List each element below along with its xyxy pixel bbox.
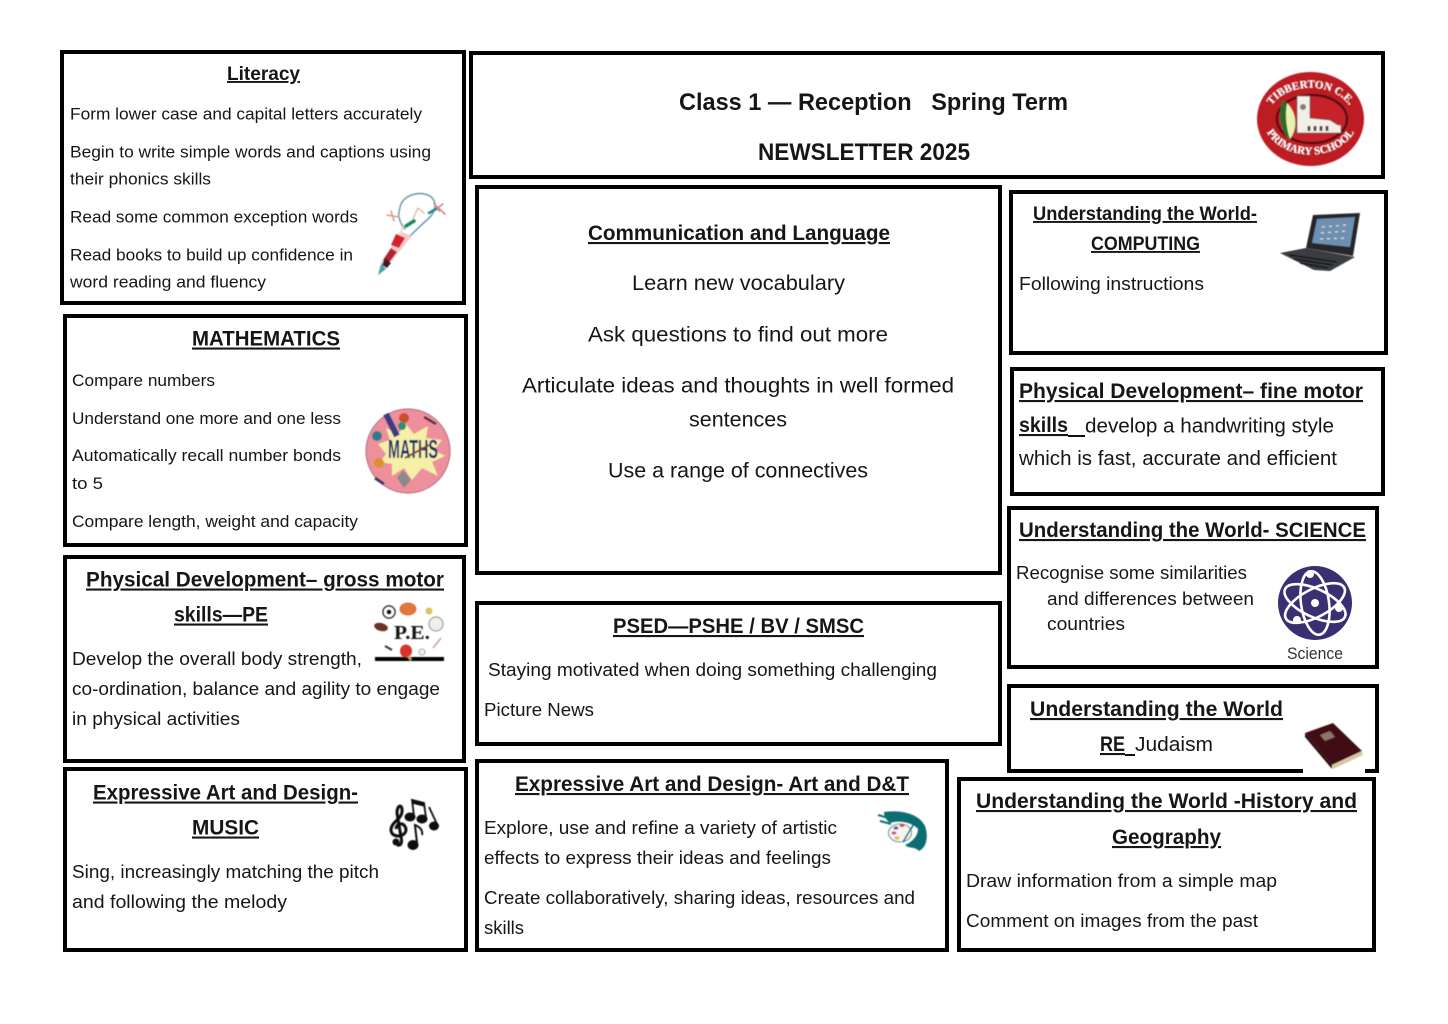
text: music objectives: [72, 862, 379, 912]
heading: music: [93, 782, 358, 840]
heading: computing: COMPUTING: [1091, 234, 1200, 255]
heading: gross motor: Physical Development– gross motor: [86, 568, 444, 592]
text: mathematics objectives: Automatically recall number bonds: [72, 446, 341, 465]
text: RE Judaism: [1100, 733, 1213, 756]
text: science objective: countries: [1047, 614, 1125, 634]
title: NEWSLETTER 2025: [758, 139, 970, 166]
panel: expressive art music: [65, 769, 466, 950]
panel: understanding the world science: [1009, 508, 1377, 667]
text: music objectives: and following the melody: [72, 892, 287, 912]
heading: computing: Understanding the World-: [1033, 204, 1257, 225]
text: communication objectives: Articulate ideas and thoughts in well formed: [522, 374, 954, 398]
text: literacy objectives: [69, 104, 431, 292]
title: [679, 89, 1068, 166]
text: art objectives: effects to express their ideas and feelings: [484, 848, 831, 868]
heading: computing: [1033, 204, 1257, 255]
text: music objectives: Sing, increasingly matching the pitch: [72, 862, 379, 882]
text: mathematics objectives: Understand one more and one less: [72, 409, 341, 428]
panel: understanding the world computing: [1011, 192, 1386, 353]
heading: PSED: PSED—PSHE / BV / SMSC: [613, 615, 864, 638]
text: computing objective: Following instructions: [1019, 274, 1204, 294]
panel: literacy: [62, 52, 464, 303]
icon: music notes: [391, 800, 439, 850]
panel: physical development fine motor: [1012, 369, 1383, 494]
text: gross motor objectives: [72, 649, 440, 729]
icon: maths badge: MATHS: [388, 434, 438, 464]
heading: fine motor: [1019, 380, 1363, 437]
text: mathematics objectives: [72, 371, 358, 531]
text: art objectives: [484, 818, 915, 938]
text: history objectives: Comment on images from the past: [966, 911, 1258, 931]
panel: mathematics: [65, 316, 466, 545]
text: art objectives: skills: [484, 918, 524, 938]
icon: school crest: TIBBERTON C.E.: [1266, 79, 1353, 106]
icon: school crest: PRIMARY SCHOOL: [1266, 128, 1355, 156]
heading: music: MUSIC: [192, 816, 259, 840]
text: fine motor objective: [1018, 416, 1337, 470]
text: fine motor objective: which is fast, accurate and efficient: [1018, 448, 1337, 470]
text: gross motor objectives: in physical activities: [72, 709, 240, 729]
icon: paint palette: [878, 811, 927, 851]
panel: physical development gross motor: [65, 557, 464, 761]
icon: science atom: [1278, 566, 1352, 663]
panel: understanding the world RE: [1009, 686, 1377, 774]
heading: history and geography: [976, 790, 1357, 849]
title: Class 1 — Reception Spring Term: [679, 89, 1068, 116]
text: science objective: Recognise some similarities: [1016, 563, 1247, 583]
text: PSED objectives: Staying motivated when doing something challenging: [488, 660, 937, 680]
text: communication objectives: Ask questions to find out more: [588, 324, 888, 346]
text: communication objectives: Use a range of connectives: [608, 460, 868, 482]
heading: gross motor: skills—PE: [174, 604, 268, 626]
text: communication objectives: sentences: [689, 408, 787, 432]
icon: light bulb pencil: [378, 194, 445, 275]
text: mathematics objectives: Compare numbers: [72, 371, 215, 390]
panel: understanding the world history and geography: [959, 779, 1374, 950]
heading: mathematics: MATHEMATICS: [192, 328, 340, 350]
text: communication objectives: [522, 272, 954, 482]
panel: expressive art and design, art and D&T: [477, 761, 947, 950]
text: RE Judaism: Judaism: [1135, 734, 1213, 756]
text: RE Judaism: RE: [1100, 733, 1125, 756]
text: mathematics objectives: Compare length, weight and capacity: [72, 512, 358, 531]
text: literacy objectives: their phonics skills: [70, 170, 211, 188]
text: art objectives: Explore, use and refine a variety of artistic: [484, 818, 837, 838]
panel: PSED: [477, 603, 1000, 744]
text: gross motor objectives: Develop the overall body strength,: [72, 649, 362, 669]
heading: literacy: Literacy: [227, 64, 300, 85]
panel: communication and language: [477, 187, 1000, 573]
text: history objectives: Draw information from a simple map: [966, 871, 1277, 891]
text: literacy objectives: Form lower case and capital letters accurately: [70, 104, 423, 124]
text: literacy objectives: Read books to build up confidence in: [70, 246, 353, 264]
text: gross motor objectives: co-ordination, balance and agility to engage: [72, 679, 440, 699]
text: PSED objectives: Picture News: [484, 700, 594, 720]
text: science objective: [1016, 563, 1254, 634]
text: literacy objectives: word reading and fluency: [69, 272, 267, 292]
text: communication objectives: Learn new vocabulary: [632, 272, 846, 295]
icon: PE sports balls: [373, 602, 444, 661]
text: science objective: and differences between: [1047, 589, 1254, 609]
heading: gross motor: [86, 568, 444, 626]
icon: science atom: Science: [1287, 644, 1343, 663]
heading: music: Expressive Art and Design-: [93, 782, 358, 804]
heading: history and geography: Geography: [1112, 826, 1221, 849]
heading: history and geography: Understanding the World -History and: [976, 790, 1357, 813]
text: mathematics objectives: to 5: [72, 474, 103, 493]
heading: communication and language: Communication and Language: [588, 222, 890, 245]
icon: school crest: [1256, 71, 1365, 167]
heading: science: Understanding the World- SCIENCE: [1019, 519, 1366, 542]
text: literacy objectives: Read some common exception words: [70, 208, 358, 226]
heading: fine motor: skills: [1019, 414, 1068, 437]
heading: fine motor: Physical Development– fine motor: [1019, 380, 1363, 403]
text: art objectives: Create collaboratively, sharing ideas, resources and: [484, 888, 915, 908]
icon: maths badge: [366, 409, 450, 493]
text: fine motor objective: develop a handwriting style: [1085, 416, 1334, 438]
text: history objectives: [966, 871, 1277, 931]
text: PSED objectives: [484, 660, 937, 720]
heading: understanding the world: Understanding the World: [1030, 698, 1283, 721]
icon: holy book: [1305, 723, 1363, 769]
heading: art and D&T: Expressive Art and Design- Art and D&T: [515, 773, 909, 796]
icon: tablet with keyboard: [1280, 213, 1360, 271]
panel: newsletter title: [469, 51, 1385, 179]
icon: PE sports balls: P.E.: [394, 622, 430, 644]
text: literacy objectives: Begin to write simple words and captions using: [70, 142, 431, 162]
